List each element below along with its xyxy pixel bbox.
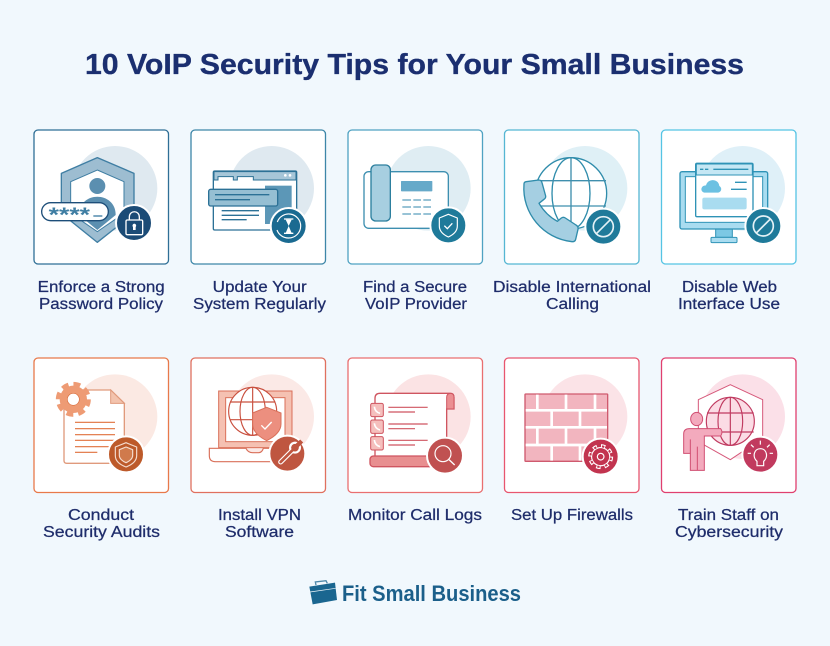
label: Train Staff on bbox=[678, 507, 779, 524]
panel: conduct security audits bbox=[34, 358, 168, 541]
label: Password Policy bbox=[39, 296, 163, 313]
label: Disable Web bbox=[682, 279, 777, 296]
label: Conduct bbox=[68, 507, 135, 524]
panel: set up firewalls bbox=[504, 358, 639, 524]
label bbox=[675, 507, 783, 541]
label: Security Audits bbox=[43, 524, 160, 541]
label bbox=[43, 507, 160, 541]
label: Interface Use bbox=[678, 296, 780, 313]
icon: laptop with globe and wrench bbox=[209, 374, 314, 472]
panel: enforce a strong password policy bbox=[34, 130, 168, 313]
label bbox=[363, 279, 467, 313]
label: Cybersecurity bbox=[675, 524, 783, 541]
label bbox=[38, 279, 165, 313]
icon: desk phone with shield bbox=[364, 146, 471, 243]
label bbox=[493, 279, 651, 313]
panel: disable web interface use bbox=[662, 130, 796, 313]
icon: globe with handset bbox=[524, 146, 627, 245]
label: Enforce a Strong bbox=[38, 279, 165, 296]
label bbox=[678, 279, 780, 313]
label: System Regularly bbox=[193, 296, 326, 313]
icon: call log scroll with magnifier bbox=[370, 374, 471, 474]
label: VoIP Provider bbox=[365, 296, 467, 313]
label: Disable International bbox=[493, 279, 651, 296]
brand name: Fit Small Business bbox=[342, 581, 521, 606]
icon: trainer pointing at globe bbox=[684, 374, 785, 473]
icon: briefcase bbox=[309, 581, 337, 604]
label bbox=[193, 279, 326, 313]
panel: find a secure voip provider bbox=[348, 130, 482, 313]
icon: brick wall with gear bbox=[525, 374, 627, 475]
label: Calling bbox=[546, 296, 599, 313]
label bbox=[218, 507, 301, 541]
icon: monitor with browser window bbox=[680, 146, 785, 244]
panel: disable international calling bbox=[493, 130, 651, 313]
title: 10 VoIP Security Tips for Your Small Business bbox=[85, 49, 744, 81]
label: Install VPN bbox=[218, 507, 301, 524]
panel: train staff on cybersecurity bbox=[662, 358, 796, 541]
icon: browser window with hourglass bbox=[209, 146, 314, 244]
icon: shield with password and lock: **** bbox=[49, 204, 91, 227]
label: Set Up Firewalls bbox=[511, 507, 633, 524]
label: Update Your bbox=[213, 279, 307, 296]
label: Monitor Call Logs bbox=[348, 507, 482, 524]
label: Software bbox=[225, 524, 294, 541]
panel: install vpn software bbox=[191, 358, 326, 541]
logo: fit small business bbox=[309, 581, 521, 606]
icon: shield with password and lock bbox=[42, 146, 157, 242]
panel: update your system regularly bbox=[191, 130, 326, 313]
label: Find a Secure bbox=[363, 279, 467, 296]
icon: document with gear and shield bbox=[59, 374, 157, 472]
panel: monitor call logs bbox=[348, 358, 482, 524]
